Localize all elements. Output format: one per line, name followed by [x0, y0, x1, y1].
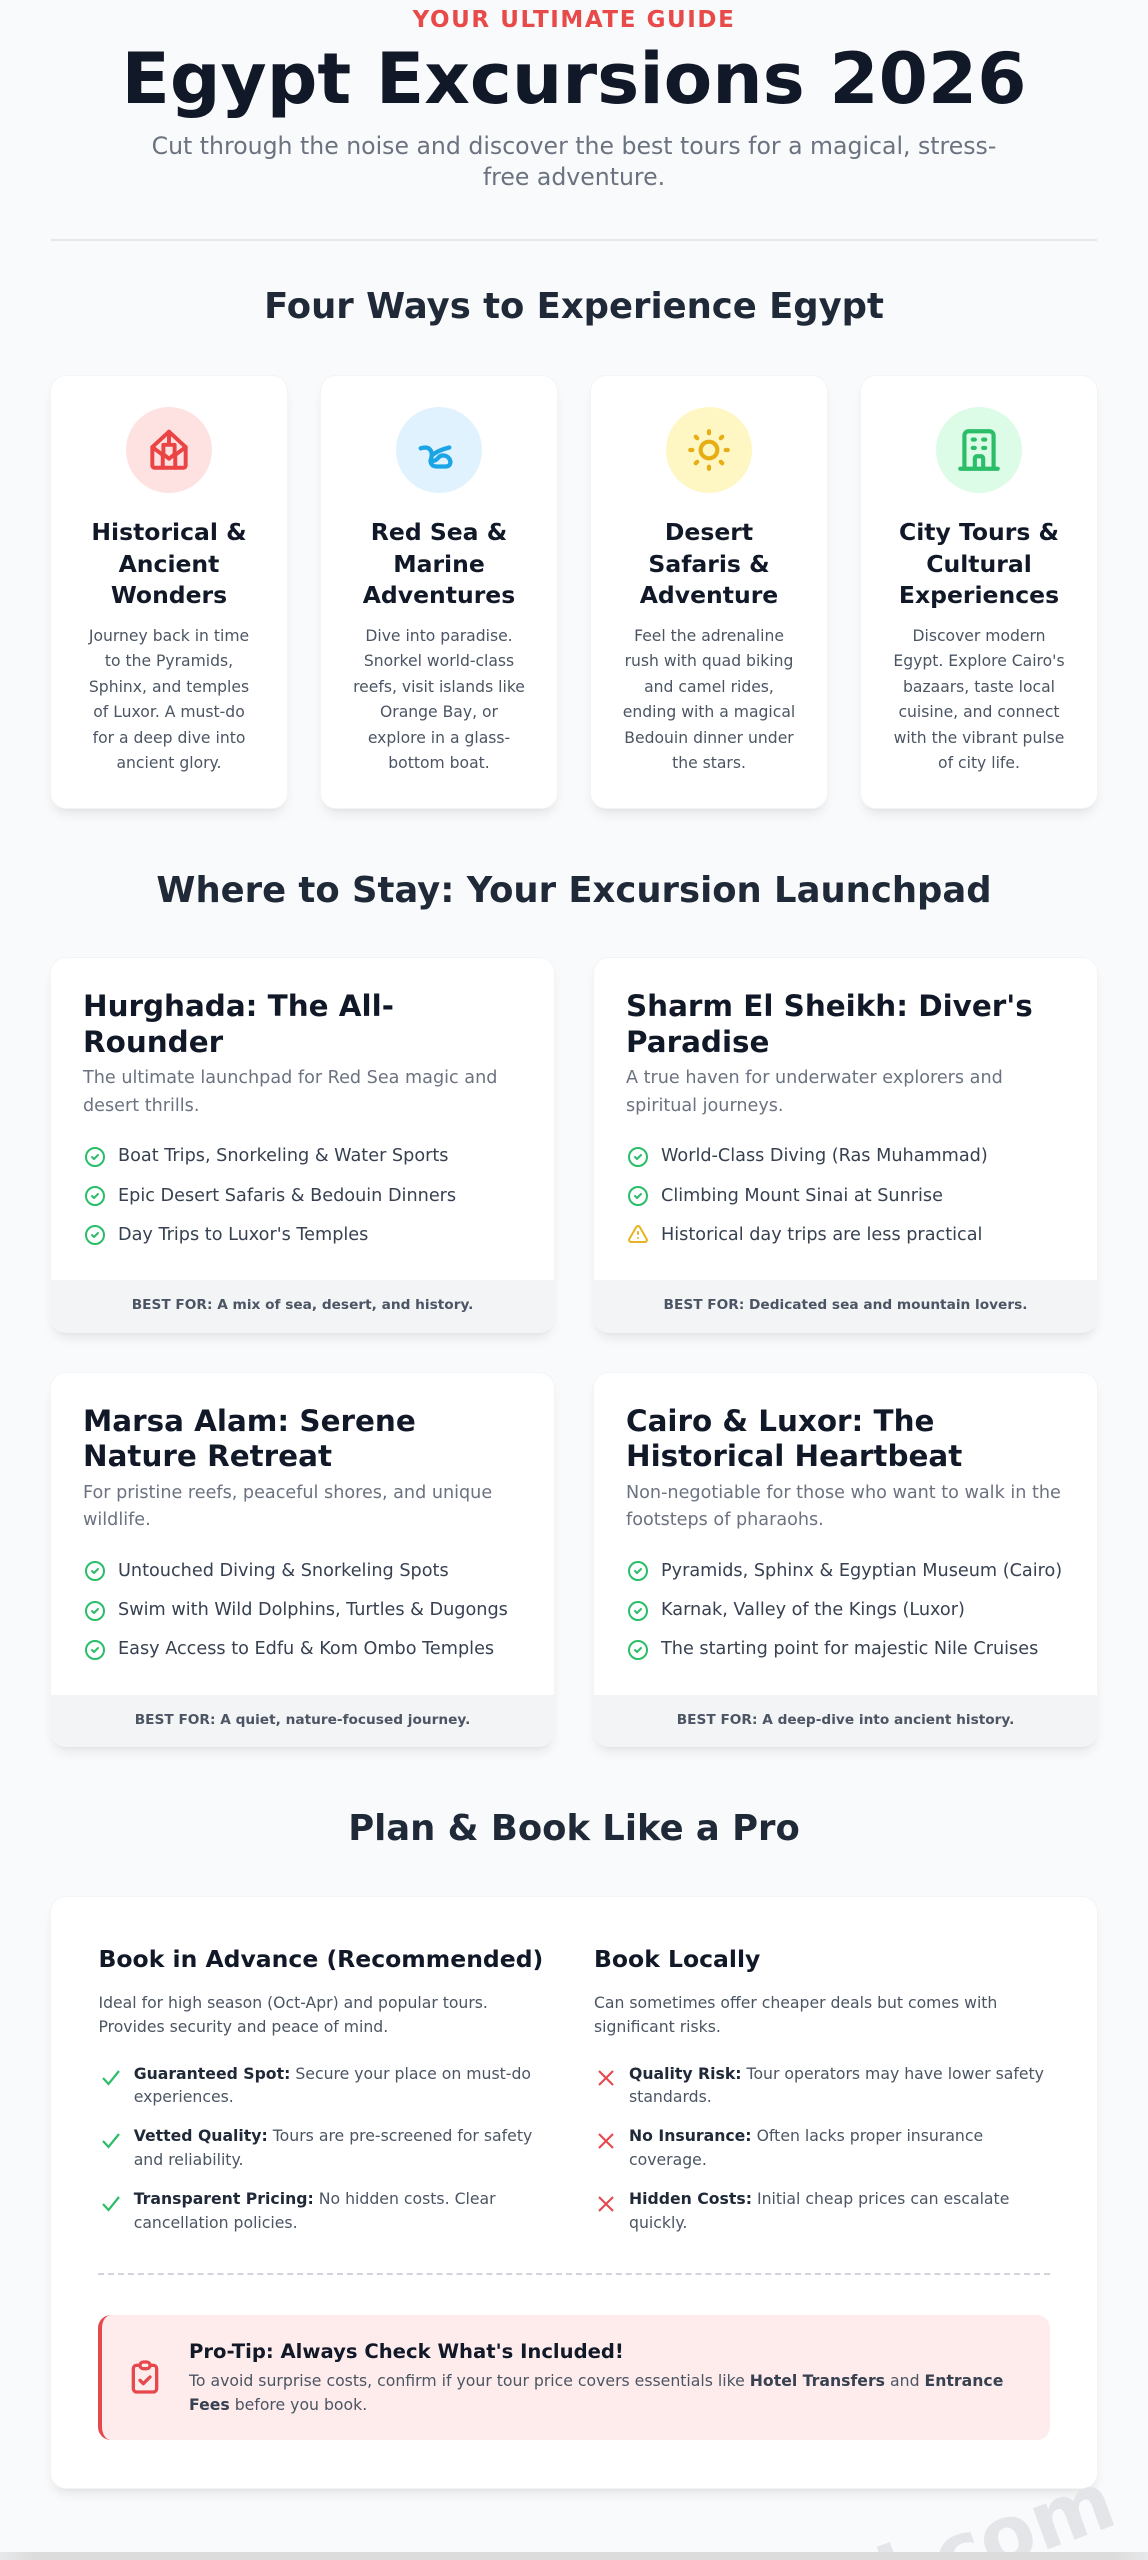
- heading: book locally: Book Locally: [594, 1945, 760, 1973]
- card title: Marine: [393, 550, 485, 578]
- list item: Guaranteed Spot: Secure your place on must-do: [134, 2064, 531, 2082]
- list item: Swim with Wild Dolphins, Turtles & Dugongs: [118, 1600, 508, 1620]
- card title: Adventures: [363, 581, 515, 609]
- icon: cross: [596, 2194, 616, 2214]
- card description: Snorkel world-class: [364, 652, 514, 670]
- panel: red sea card: [321, 376, 557, 808]
- subtitle: [152, 132, 996, 191]
- heading: where to stay: Where to Stay: Your Excursion Launchpad: [156, 870, 992, 911]
- card description: the stars.: [672, 754, 746, 772]
- icon: wave: [396, 407, 482, 493]
- list item: No Insurance: Often lacks proper insurance: [629, 2126, 983, 2145]
- text: book in advance description: Ideal for high season (Oct-Apr) and popular tours.: [98, 1993, 488, 2012]
- card description: of Luxor. A must-do: [93, 703, 245, 721]
- icon: clipboard check: [125, 2357, 165, 2397]
- heading: book in advance: Book in Advance (Recommended): [98, 1945, 543, 1973]
- location title: [83, 989, 394, 1059]
- panel: sharm el sheikh: [594, 958, 1097, 1332]
- location title: Paradise: [626, 1025, 769, 1059]
- card title: [362, 518, 515, 609]
- list item: Quality Risk: Tour operators may have lower safety: [629, 2064, 1044, 2082]
- card description: rush with quad biking: [625, 652, 793, 670]
- icon: check: [102, 2070, 120, 2086]
- card description: to the Pyramids,: [105, 652, 233, 670]
- list item: Hidden Costs: Initial cheap prices can escalate: [629, 2189, 1009, 2208]
- location description: The ultimate launchpad for Red Sea magic and: [83, 1068, 497, 1088]
- list item: quickly.: [629, 2213, 687, 2232]
- card description: Journey back in time: [89, 626, 249, 644]
- location description: spiritual journeys.: [626, 1096, 784, 1116]
- icon: check: [102, 2196, 120, 2212]
- location description: A true haven for underwater explorers and: [626, 1068, 1003, 1088]
- list item: Karnak, Valley of the Kings (Luxor): [661, 1600, 965, 1620]
- icon: cross: [598, 2133, 614, 2149]
- title: Egypt Excursions 2026: [122, 37, 1026, 120]
- card description: [88, 626, 249, 772]
- card description: [623, 626, 795, 772]
- panel: city card: [861, 376, 1097, 808]
- list item: World-Class Diving (Ras Muhammad): [661, 1146, 988, 1166]
- location title: Cairo & Luxor: The: [626, 1404, 934, 1438]
- card title: [91, 518, 247, 609]
- card title: Ancient: [119, 550, 219, 578]
- location title: [626, 989, 1033, 1059]
- location title: Historical Heartbeat: [626, 1439, 962, 1473]
- card description: Sphinx, and temples: [89, 678, 249, 696]
- icon: sun: [666, 407, 752, 493]
- callout text: To avoid surprise costs, confirm if your tour price covers essentials like Hotel Transfers and Entrance: [189, 2371, 1003, 2390]
- location description: [626, 1068, 1003, 1116]
- location description: [82, 1068, 497, 1116]
- list item: and reliability.: [134, 2150, 244, 2169]
- list item: cancellation policies.: [134, 2213, 298, 2232]
- text: book in advance description: Provides security and peace of mind.: [98, 2017, 388, 2036]
- card description: Feel the adrenaline: [634, 626, 784, 644]
- card description: ending with a magical: [623, 703, 795, 721]
- card title: [899, 518, 1059, 609]
- location description: [83, 1483, 492, 1530]
- location title: Nature Retreat: [83, 1439, 332, 1473]
- list item: [629, 2187, 1009, 2234]
- best for footer: [594, 1695, 1097, 1746]
- card title: Experiences: [899, 581, 1059, 609]
- list item: [629, 2064, 1044, 2106]
- list item with warning icon: Historical day trips are less practical: [661, 1225, 982, 1245]
- best for footer: BEST FOR: A deep-dive into ancient history.: [677, 1712, 1014, 1728]
- best for footer: [51, 1695, 554, 1746]
- list item: Day Trips to Luxor's Temples: [118, 1225, 368, 1245]
- list item: The starting point for majestic Nile Cruises: [661, 1639, 1038, 1659]
- text: book locally description: Can sometimes offer cheaper deals but comes with: [594, 1993, 997, 2012]
- location description: For pristine reefs, peaceful shores, and unique: [83, 1483, 492, 1503]
- card description: Bedouin dinner under: [624, 728, 794, 746]
- location description: footsteps of pharaohs.: [626, 1510, 824, 1530]
- card description: with the vibrant pulse: [894, 728, 1064, 746]
- text: book locally description: significant risks.: [594, 2017, 721, 2036]
- card description: [893, 626, 1065, 772]
- panel: hurghada: [51, 958, 554, 1332]
- callout title: Pro-Tip: Always Check What's Included!: [189, 2340, 624, 2363]
- list item: standards.: [629, 2087, 712, 2106]
- list item: [629, 2124, 983, 2171]
- panel: plan and book: [51, 1897, 1097, 2488]
- list item: Climbing Mount Sinai at Sunrise: [661, 1186, 943, 1206]
- location description: Non-negotiable for those who want to walk in the: [626, 1483, 1061, 1503]
- subtitle: free adventure.: [483, 163, 665, 191]
- text: book locally description: [594, 1993, 997, 2036]
- location description: wildlife.: [83, 1510, 151, 1530]
- list item: Transparent Pricing: No hidden costs. Clear: [134, 2189, 496, 2208]
- location title: Hurghada: The All-: [83, 989, 394, 1023]
- location title: Rounder: [83, 1025, 223, 1059]
- location description: desert thrills.: [83, 1096, 199, 1116]
- best for footer: [51, 1280, 554, 1332]
- list item: Epic Desert Safaris & Bedouin Dinners: [118, 1186, 456, 1206]
- list item: Pyramids, Sphinx & Egyptian Museum (Cairo): [661, 1561, 1062, 1581]
- callout: pro tip: [98, 2315, 1050, 2440]
- location title: Marsa Alam: Serene: [83, 1404, 416, 1438]
- card description: Dive into paradise.: [365, 626, 513, 644]
- card description: Discover modern: [912, 626, 1046, 644]
- card title: Historical &: [91, 518, 247, 546]
- panel: historical card: [51, 376, 287, 808]
- card description: bazaars, taste local: [903, 678, 1055, 696]
- list item: [134, 2064, 531, 2106]
- card description: explore in a glass-: [368, 728, 510, 746]
- best for footer: BEST FOR: A mix of sea, desert, and history.: [132, 1297, 473, 1313]
- text: book in advance description: [98, 1993, 488, 2036]
- card description: cuisine, and connect: [898, 703, 1060, 721]
- card description: for a deep dive into: [93, 728, 245, 746]
- list item: Untouched Diving & Snorkeling Spots: [118, 1561, 449, 1581]
- icon: cross: [598, 2070, 614, 2086]
- best for footer: BEST FOR: Dedicated sea and mountain lovers.: [664, 1297, 1027, 1313]
- callout text: Fees before you book.: [189, 2395, 367, 2414]
- location title: Sharm El Sheikh: Diver's: [626, 989, 1033, 1023]
- card description: Orange Bay, or: [380, 703, 498, 721]
- panel: marsa alam: [51, 1373, 554, 1746]
- list item: [134, 2189, 496, 2232]
- card title: Safaris &: [648, 550, 770, 578]
- panel: desert card: [591, 376, 827, 808]
- card title: Red Sea &: [371, 518, 507, 546]
- card title: City Tours &: [899, 518, 1059, 546]
- card description: and camel rides,: [644, 678, 774, 696]
- best for footer: BEST FOR: A quiet, nature-focused journey.: [135, 1712, 470, 1728]
- card description: bottom boat.: [388, 754, 490, 772]
- card description: of city life.: [938, 754, 1020, 772]
- icon: building: [936, 407, 1022, 493]
- card description: Egypt. Explore Cairo's: [893, 652, 1065, 670]
- card description: [353, 626, 525, 772]
- list item: Easy Access to Edfu & Kom Ombo Temples: [118, 1639, 494, 1659]
- icon: temple: [126, 407, 212, 493]
- list item: Vetted Quality: Tours are pre-screened for safety: [134, 2126, 532, 2145]
- callout text: [189, 2369, 1003, 2417]
- list item: [134, 2126, 532, 2169]
- icon: check: [102, 2133, 120, 2149]
- best for footer: [594, 1280, 1097, 1332]
- list item: coverage.: [629, 2150, 707, 2169]
- eyebrow: your ultimate guide: YOUR ULTIMATE GUIDE: [413, 7, 735, 33]
- card title: Wonders: [111, 581, 227, 609]
- card title: [640, 518, 778, 609]
- heading: four ways: Four Ways to Experience Egypt: [264, 286, 884, 327]
- card title: Cultural: [926, 550, 1032, 578]
- subtitle: Cut through the noise and discover the best tours for a magical, stress-: [152, 132, 996, 160]
- card description: ancient glory.: [116, 754, 222, 772]
- list item: Boat Trips, Snorkeling & Water Sports: [118, 1146, 448, 1166]
- panel: cairo and luxor: [594, 1373, 1097, 1746]
- card title: Desert: [665, 518, 753, 546]
- location title: [626, 1404, 962, 1473]
- list item: experiences.: [134, 2087, 234, 2106]
- location title: [83, 1404, 416, 1473]
- card title: Adventure: [640, 581, 778, 609]
- heading: plan and book: Plan & Book Like a Pro: [348, 1808, 800, 1849]
- card description: reefs, visit islands like: [353, 678, 525, 696]
- location description: [626, 1483, 1061, 1530]
